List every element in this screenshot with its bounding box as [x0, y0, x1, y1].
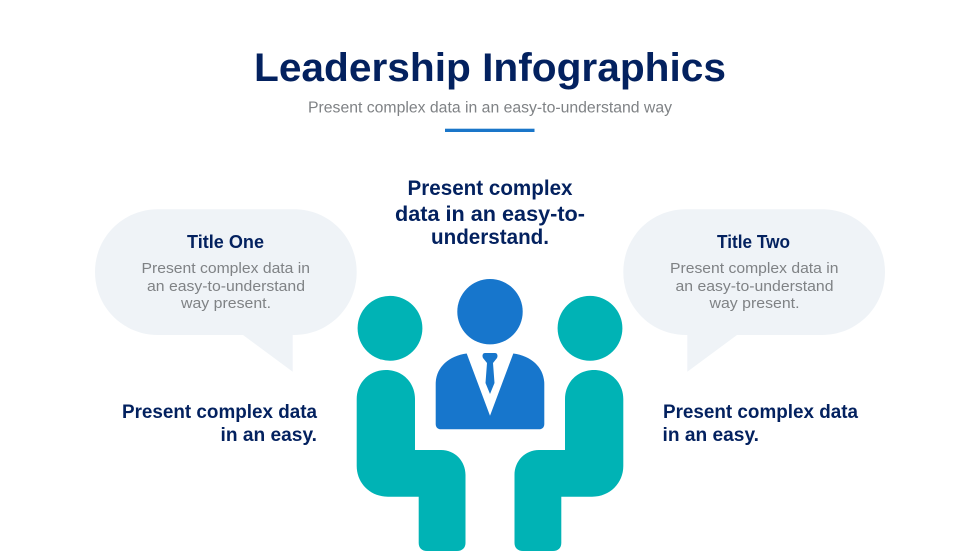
subtitle: Present complex data in an easy-to-understand way	[308, 100, 672, 116]
bubble body: right: an easy-to-understand	[676, 278, 834, 295]
left caption: Present complex data	[122, 402, 317, 423]
panel: left speech bubble	[95, 209, 357, 372]
left caption: in an easy.	[220, 425, 317, 446]
central statement: Present complex	[408, 177, 573, 200]
title: Leadership Infographics	[254, 46, 726, 90]
bubble body: right: way present.	[708, 295, 800, 312]
icon: central leader in suit	[436, 279, 544, 429]
icon: right seated person	[514, 296, 623, 551]
icon: left seated person	[357, 296, 466, 551]
bubble body: right	[670, 260, 838, 312]
bubble body: left	[142, 260, 310, 312]
bubble body: left: Present complex data in	[142, 260, 310, 277]
panel: right speech bubble	[623, 209, 885, 372]
central statement	[395, 177, 585, 249]
icon: three people meeting	[357, 279, 623, 551]
right caption	[662, 402, 858, 446]
bubble heading: Title One: Title One	[187, 232, 264, 252]
bubble body: left: way present.	[180, 295, 271, 312]
bubble body: left: an easy-to-understand	[147, 278, 305, 295]
central statement: understand.	[431, 226, 549, 249]
bubble body: right: Present complex data in	[670, 260, 838, 277]
title underline	[445, 129, 534, 132]
bubble heading: Title Two: Title Two	[717, 232, 790, 252]
bubble shape: left	[95, 209, 357, 372]
right caption: Present complex data	[663, 402, 858, 423]
central statement: data in an easy-to-	[395, 203, 585, 226]
right caption: in an easy.	[662, 425, 759, 446]
left caption	[122, 402, 317, 446]
bubble shape: right	[623, 209, 885, 372]
